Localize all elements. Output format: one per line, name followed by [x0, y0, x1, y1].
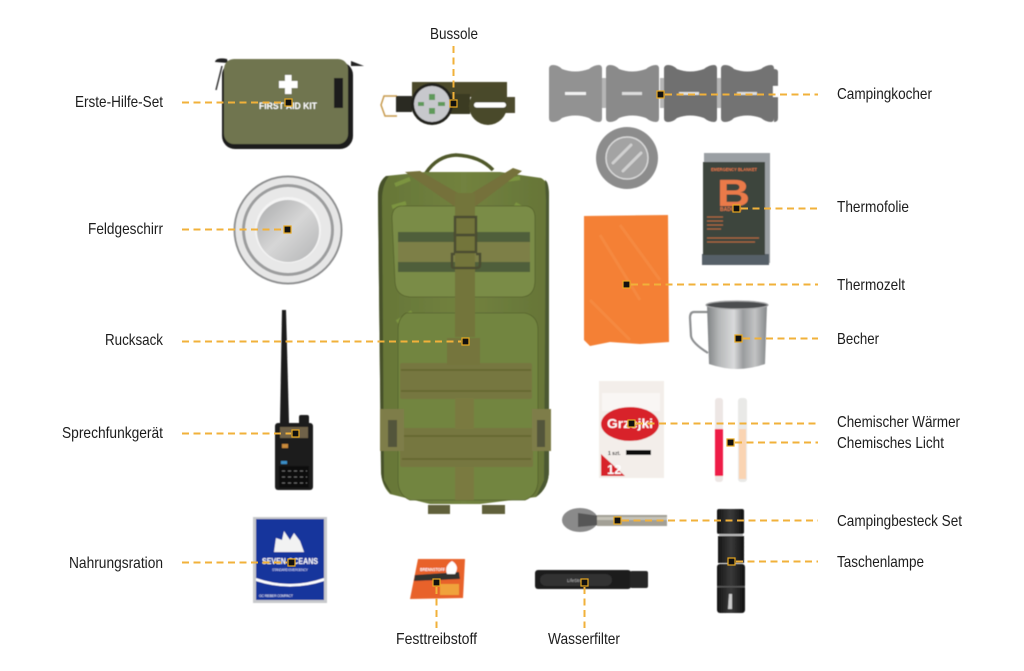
lower pocket: [398, 313, 538, 500]
icon: compass: [381, 82, 515, 125]
leader: Thermozelt: [623, 281, 818, 288]
leader: Sprechfunkgerät: [182, 430, 299, 437]
upper pocket: [392, 206, 535, 297]
label: Feldgeschirr: Feldgeschirr: [88, 221, 164, 238]
backpack zipper tabs: [392, 178, 522, 322]
icon: radio: [275, 310, 313, 490]
label: Nahrungsration: Nahrungsration: [69, 555, 163, 572]
icon: solid fuel box: BRENNSTOFF: [420, 567, 445, 572]
leader: Campingkocher: [657, 91, 818, 98]
label: Thermofolie: Thermofolie: [837, 199, 909, 216]
leader: Erste-Hilfe-Set: [182, 99, 292, 106]
label: Chemischer Wärmer: Chemischer Wärmer: [837, 414, 961, 431]
leader: Festtreibstoff: [433, 579, 440, 628]
label: Thermozelt: Thermozelt: [837, 277, 905, 294]
side straps: [380, 409, 404, 451]
icon: camping cutlery: [562, 508, 667, 532]
icon: metal plate: [234, 176, 342, 284]
backpack handle: [426, 155, 493, 173]
icon: chemical warmer pack: 12: [607, 462, 621, 477]
label: Chemisches Licht: Chemisches Licht: [837, 435, 944, 452]
icon: stove panels: [549, 65, 778, 122]
label: Rucksack: Rucksack: [105, 332, 164, 349]
label: Bussole: Bussole: [430, 26, 478, 43]
leader: Feldgeschirr: [182, 226, 291, 233]
label: Festtreibstoff: Festtreibstoff: [396, 631, 477, 648]
backpack feet: [428, 505, 450, 514]
label: Campingbesteck Set: Campingbesteck Set: [837, 513, 962, 530]
leader: Campingbesteck Set: [614, 517, 818, 524]
icon: emergency blanket: B: [717, 173, 750, 215]
leader: Thermofolie: [733, 205, 818, 212]
icon: flashlight: [717, 509, 745, 613]
icon: food ration: [253, 517, 327, 603]
icon: orange tent package: [584, 215, 669, 346]
icon: water filter: [535, 570, 648, 589]
leader: Becher: [735, 335, 818, 342]
leader: Wasserfilter: [581, 579, 588, 628]
icon: glow sticks: [715, 398, 747, 482]
icon: chemical warmer pack: 1 szt.: [608, 451, 621, 457]
icon: solid fuel box: [410, 559, 465, 599]
label: Wasserfilter: Wasserfilter: [548, 631, 621, 648]
icon: food ration: STANDARD EMERGENCY: [272, 568, 309, 572]
buckle: [452, 217, 480, 268]
leader: Bussole: [450, 46, 457, 107]
icon: emergency blanket: EMERGENCY BLANKET: [711, 167, 757, 172]
shoulder straps: [405, 168, 522, 206]
icon: first aid kit: [215, 58, 364, 149]
icon: steel mug: [690, 301, 768, 369]
icon: chemical warmer pack: [599, 381, 664, 478]
leader: Chemischer Wärmer: [628, 420, 818, 427]
label: Erste-Hilfe-Set: Erste-Hilfe-Set: [75, 94, 163, 111]
icon: backpack: [378, 155, 551, 514]
label: Taschenlampe: Taschenlampe: [837, 554, 924, 571]
icon: food ration: GC RIEBER COMPACT: [259, 594, 294, 598]
backpack body: [378, 172, 549, 504]
label: Becher: Becher: [837, 331, 880, 348]
icon: first aid kit: FIRST AID KIT: [259, 101, 318, 111]
label: Campingkocher: Campingkocher: [837, 86, 933, 103]
icon: water filter: LifeStraw: [567, 578, 587, 583]
label: Sprechfunkgerät: Sprechfunkgerät: [62, 425, 163, 442]
leader: Nahrungsration: [182, 559, 295, 566]
leader: Chemisches Licht: [727, 439, 818, 446]
icon: round lid: [596, 127, 658, 189]
icon: food ration: SEVEN OCEANS: [262, 557, 319, 566]
leader: Taschenlampe: [728, 558, 818, 565]
icon: emergency blanket: BADGER: [720, 207, 742, 213]
leader: Rucksack: [182, 338, 469, 345]
icon: chemical warmer pack: Grzejki: [607, 416, 653, 431]
icon: emergency blanket: [702, 153, 770, 265]
